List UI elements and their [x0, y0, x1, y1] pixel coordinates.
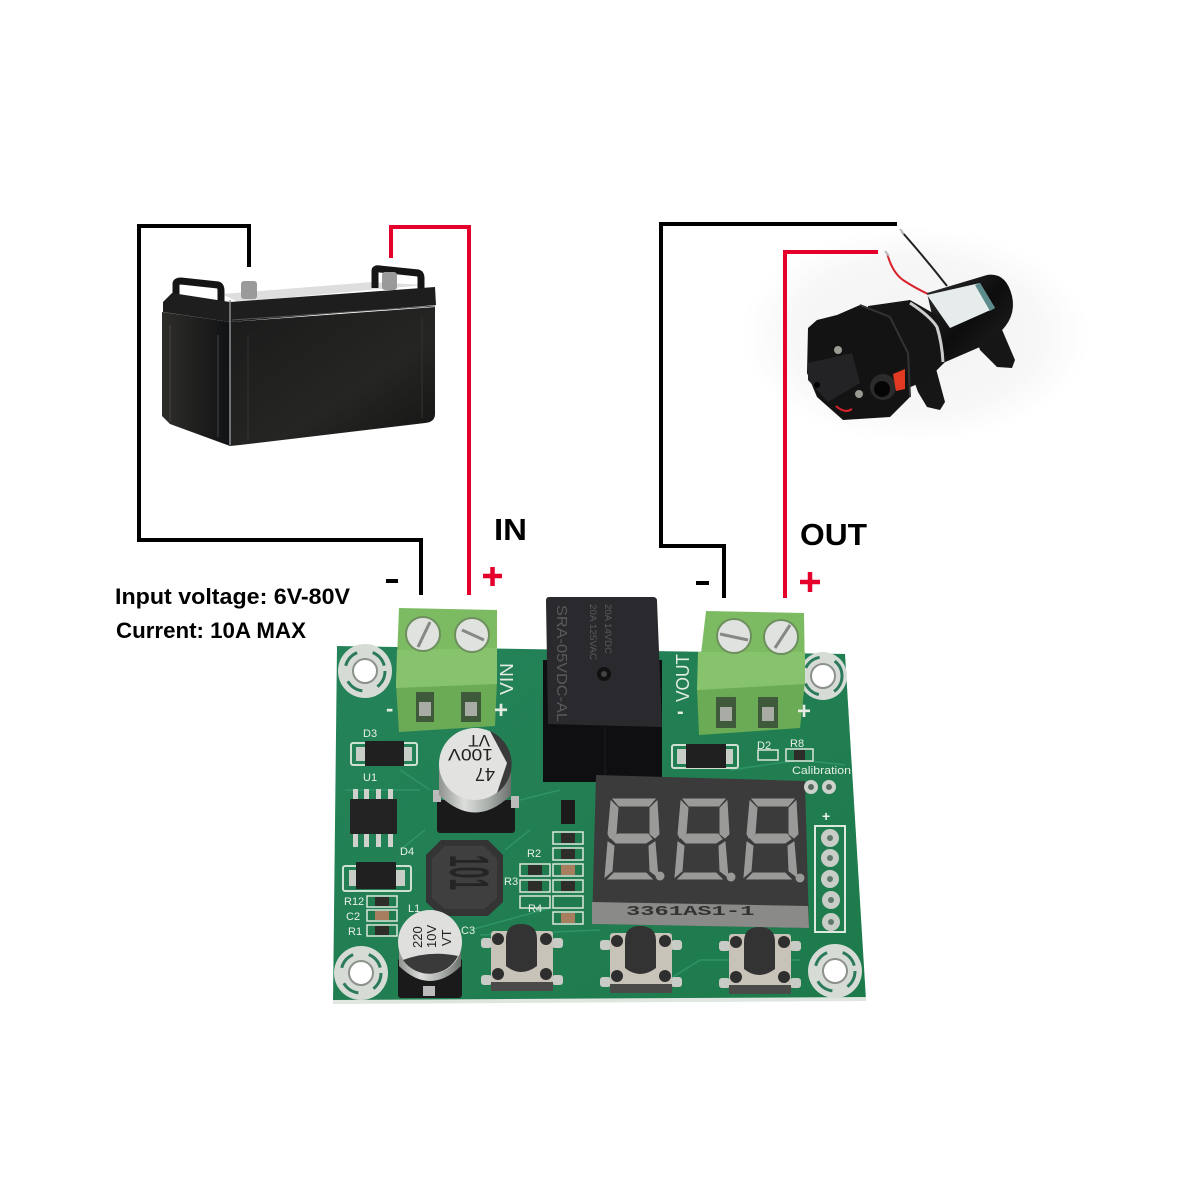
- text: current: Current: 10A MAX: [116, 618, 306, 643]
- wire: pump positive: [785, 252, 878, 598]
- board substrate: [333, 646, 866, 1003]
- calibration pads: Calibration: [792, 765, 851, 777]
- pump screws: [834, 346, 863, 398]
- capacitor: 220uF: [398, 910, 462, 998]
- sign: in plus: [483, 567, 502, 586]
- battery lid: [163, 287, 436, 322]
- button 3: [719, 927, 801, 994]
- silkscreen: part labels: R4: [528, 903, 542, 915]
- silkscreen: terminal labels: +: [797, 698, 811, 725]
- header pads: [815, 808, 845, 932]
- silkscreen: terminal labels: VOUT: [673, 654, 693, 702]
- relay: SRA-05VDC-AL: [553, 605, 570, 722]
- small SMD parts: [367, 749, 813, 936]
- pump: [807, 229, 1015, 420]
- silkscreen: terminal labels: +: [494, 697, 508, 724]
- push buttons: [481, 924, 801, 994]
- label: OUT: OUT: [800, 517, 867, 552]
- terminal block: input: [396, 608, 497, 732]
- pump neck: [868, 300, 945, 400]
- silkscreen: part labels: D2: [757, 740, 771, 752]
- silkscreen: part labels: D4: [400, 846, 414, 858]
- capacitor: 47uF: VT: [468, 731, 490, 750]
- relay: 20A 14VDC: [603, 604, 613, 655]
- digit 1: [605, 799, 659, 879]
- pump photo backdrop: [740, 227, 1090, 443]
- pump wires: [885, 229, 947, 294]
- digit 3: [744, 799, 798, 879]
- wire: battery positive: [391, 227, 469, 595]
- silkscreen: part labels: C3: [461, 925, 475, 937]
- battery handles: [176, 269, 421, 308]
- pump feet: [912, 325, 1015, 410]
- calibration pads: [792, 765, 851, 794]
- text: input voltage: Input voltage: 6V-80V: [115, 584, 350, 609]
- sign: out minus: [696, 581, 709, 585]
- capacitor: 47uF: 100V: [447, 745, 493, 764]
- pump red clip: [893, 369, 905, 391]
- inductor: 101: [438, 855, 500, 890]
- diodes: [343, 741, 738, 891]
- chip U1: [350, 789, 397, 847]
- wire: pump negative: [661, 224, 897, 598]
- battery front face: [230, 307, 435, 446]
- silkscreen: part labels: R12: [344, 896, 364, 908]
- board traces: [345, 760, 845, 985]
- silkscreen: part labels: R8: [790, 738, 804, 750]
- label: IN: IN: [494, 512, 527, 547]
- wire: battery negative: [139, 226, 421, 595]
- sign: in minus: [386, 579, 398, 583]
- silkscreen: terminal labels: -: [677, 701, 684, 723]
- silkscreen: part labels: R2: [527, 848, 541, 860]
- battery terminal posts: [241, 272, 397, 299]
- seven-segment display: 3361AS1-1: [626, 904, 754, 919]
- battery top: [222, 282, 425, 302]
- pump port: [870, 374, 896, 400]
- silkscreen: part labels: [344, 728, 804, 938]
- terminal block: output: [697, 611, 805, 735]
- silkscreen: part labels: L1: [408, 903, 420, 915]
- silkscreen: terminal labels: [386, 654, 811, 725]
- header pads: +: [822, 808, 830, 824]
- pump head: [807, 305, 910, 420]
- pump front block: [808, 353, 860, 402]
- silkscreen: part labels: C2: [346, 911, 360, 923]
- capacitor: 220uF: VT: [439, 929, 454, 946]
- pump motor: [927, 275, 1013, 363]
- button 2: [600, 926, 682, 993]
- battery: [162, 269, 436, 446]
- relay: 20A 125VAC: [588, 604, 598, 661]
- silkscreen: part labels: U1: [363, 772, 377, 784]
- pump label: [927, 283, 995, 328]
- capacitor: 47uF: [433, 728, 519, 833]
- silkscreen: part labels: R1: [348, 926, 362, 938]
- decimal dots: [656, 872, 804, 882]
- silkscreen: terminal labels: VIN: [497, 663, 517, 695]
- capacitor: 47uF: 47: [475, 764, 495, 784]
- circuit board: [333, 597, 866, 1004]
- sign: out plus: [800, 572, 820, 592]
- inductor: [426, 840, 503, 916]
- silkscreen: part labels: D3: [363, 728, 377, 740]
- seven-segment display: [592, 775, 809, 928]
- capacitor: 220uF: 220: [410, 926, 425, 948]
- digit 2: [675, 799, 729, 879]
- button 1: [481, 924, 563, 991]
- silkscreen: terminal labels: -: [386, 696, 393, 721]
- silkscreen: part labels: R3: [504, 876, 518, 888]
- mounting holes: [334, 644, 862, 1000]
- battery left face: [162, 312, 230, 446]
- relay: [543, 597, 662, 782]
- capacitor: 220uF: 10V: [424, 925, 439, 948]
